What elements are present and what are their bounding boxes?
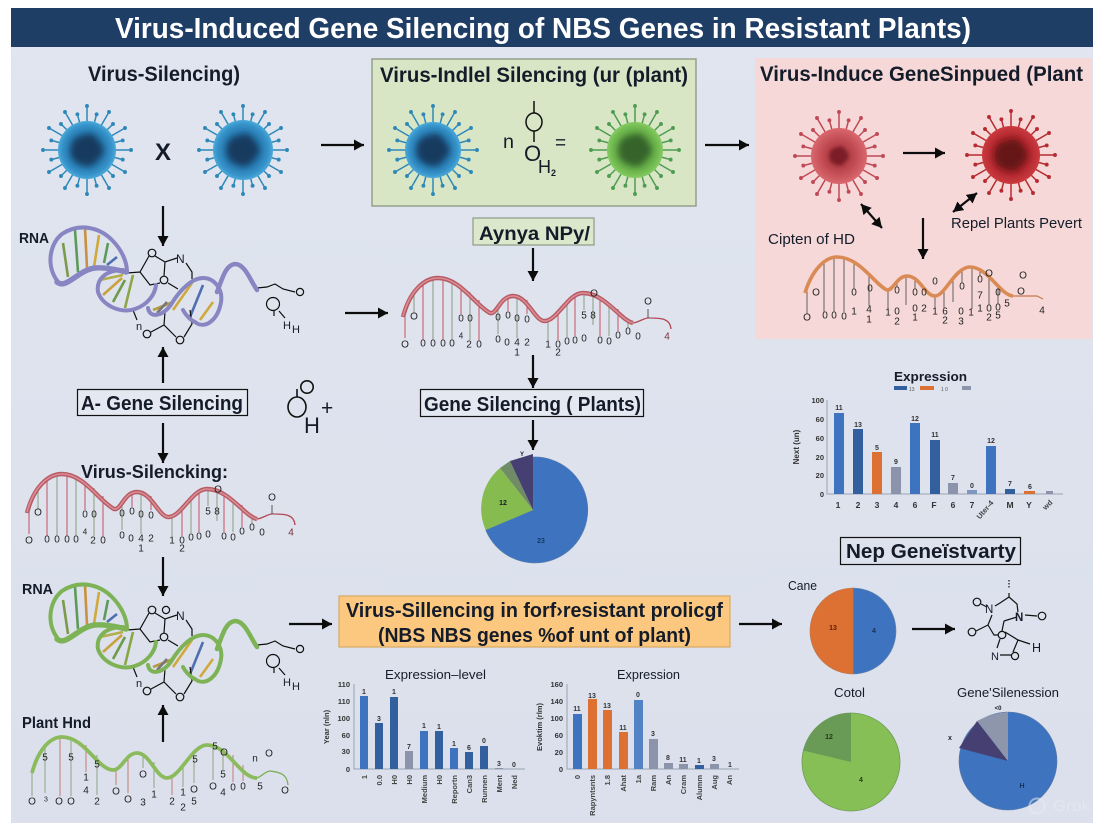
- icon: green RNA helix: H: [283, 677, 291, 689]
- panel: virus silencing heading and viruses: X: [155, 139, 171, 166]
- icon: molecule: [968, 580, 1046, 663]
- bar chart: expression bottom: Aug: [710, 775, 719, 790]
- arrow: viruses to green panel: [321, 144, 364, 146]
- orange strand: 0: [995, 288, 1001, 298]
- panel: red virus-induced gene: [755, 58, 1092, 339]
- bar chart: expression bottom: 11: [619, 725, 627, 732]
- orange strand: 4: [1039, 306, 1045, 316]
- bar chart: expression-level: [322, 668, 525, 804]
- icon: green strand: 5: [192, 754, 198, 766]
- bar chart: expression-level: H0: [390, 775, 399, 785]
- icon: purple RNA helix: N: [176, 252, 185, 266]
- icon: molecule: N: [1015, 612, 1023, 624]
- bar chart: expression top right: Y: [1026, 500, 1032, 510]
- bar chart: expression-level: 7: [407, 744, 411, 751]
- orange strand: 2: [894, 316, 900, 328]
- icon: green strand: 5: [68, 752, 74, 764]
- orange strand: 3: [958, 316, 964, 328]
- panel: green virus-induced silencing: [372, 59, 696, 206]
- icon: green strand: n: [252, 754, 258, 764]
- orange strand: O: [812, 288, 820, 298]
- arrow: down to virus-silencking: [162, 423, 164, 463]
- orange strand: O: [1019, 270, 1027, 282]
- arrow: virus to RNA: [162, 206, 164, 246]
- orange strand: 4: [866, 304, 872, 316]
- bar chart: expression top right: 12: [987, 438, 995, 445]
- label: Aynya NP box: Aynya NPy/: [479, 224, 591, 245]
- icon: purple RNA helix: H: [283, 320, 291, 332]
- bar chart: expression top right: 5: [875, 445, 879, 452]
- icon: green strand: O: [55, 796, 63, 808]
- icon: chemical formula with plus: [288, 381, 333, 438]
- arrow: to pie: [532, 420, 534, 450]
- watermark: Grok: [1030, 798, 1091, 815]
- bar chart: expression-level: 0: [512, 762, 516, 769]
- orange strand: 0: [912, 304, 918, 314]
- orange strand: 0: [851, 288, 857, 298]
- icon: purple RNA helix: RNA: [19, 231, 49, 247]
- orange strand: 0: [959, 282, 965, 292]
- arrow: up to green helix: [162, 705, 164, 742]
- icon: green strand: 3: [44, 796, 48, 804]
- arrow: helix to orange box: [289, 623, 332, 625]
- bar chart: expression bottom: 0: [636, 692, 640, 699]
- icon: green strand: 4: [83, 786, 89, 796]
- icon: green strand: 2: [169, 796, 175, 808]
- icon: green strand: 5: [191, 796, 197, 808]
- orange strand: O: [803, 312, 811, 324]
- bar chart: expression top right: 7: [970, 500, 975, 510]
- orange strand: 5: [995, 310, 1001, 322]
- pie chart: centre: [481, 452, 588, 563]
- icon: green strand: O: [209, 782, 217, 792]
- bar chart: expression top right: 4: [894, 500, 899, 510]
- pie chart: Cane: Cane: [788, 579, 817, 593]
- bar chart: expression top right: 20: [816, 471, 824, 480]
- panel: green virus-induced silencing: Virus-Indlel Silencing (ur (plant): [380, 64, 688, 87]
- bar chart: expression bottom: Rapyntsnts: [588, 775, 597, 816]
- label: Aynya NP box: [473, 218, 594, 245]
- bar chart: expression bottom: Evoktim (rlm): [535, 703, 544, 751]
- callout: orange box: [339, 596, 730, 647]
- panel: green virus-induced silencing: O: [524, 141, 541, 166]
- bar chart: expression bottom: 3: [651, 731, 655, 738]
- bar chart: expression top right: 13: [909, 387, 915, 393]
- icon: green strand: O: [190, 784, 198, 796]
- bar chart: expression top right: Next (un): [792, 429, 801, 464]
- bar chart: expression-level: 1: [360, 775, 369, 779]
- arrow: RNA to middle strand: [345, 312, 388, 314]
- icon: green strand: 1: [151, 790, 157, 800]
- bar chart: expression bottom: 1a: [634, 774, 643, 783]
- orange strand: 0: [822, 310, 828, 322]
- bar chart: expression-level: Year (nln): [322, 709, 331, 744]
- bar chart: expression top right: 1 0: [941, 387, 948, 393]
- bar chart: expression-level: 100: [337, 714, 350, 723]
- icon: green strand: 2: [94, 796, 100, 808]
- bar chart: expression-level: 0: [346, 765, 350, 774]
- icon: green strand: 4: [220, 788, 226, 798]
- orange strand: 0: [841, 312, 847, 322]
- bar chart: expression bottom: 100: [550, 714, 563, 723]
- orange strand: 2: [942, 316, 948, 326]
- bar chart: expression bottom: Ahat: [619, 775, 628, 792]
- bar chart: expression-level: 1: [362, 689, 366, 696]
- bar chart: expression-level: 60: [342, 731, 350, 740]
- icon: molecule: N: [991, 651, 999, 663]
- panel: green virus-induced silencing: =: [555, 133, 566, 154]
- orange strand: 0: [912, 288, 918, 298]
- bar chart: expression-level: H0: [405, 775, 414, 785]
- pie chart: Cotol: 12: [825, 734, 833, 741]
- panel: green virus-induced silencing: n: [503, 132, 514, 153]
- arrow: label to middle strand: [532, 248, 534, 281]
- orange strand: 0: [867, 284, 873, 294]
- orange strand: 0: [894, 306, 900, 318]
- label: A- Gene Silencing: A- Gene Silencing: [81, 393, 243, 415]
- icon: purple RNA helix: n: [136, 321, 142, 333]
- bar chart: expression-level: 1: [422, 723, 426, 730]
- bar chart: expression bottom: Alumm: [695, 775, 704, 800]
- bar chart: expression bottom: 11: [573, 706, 581, 713]
- icon: green strand: O: [265, 748, 273, 760]
- arrow: strand to gene silencing: [532, 355, 534, 388]
- pie chart: Cane: [788, 579, 896, 674]
- icon: red strand middle: [401, 278, 671, 358]
- panel: red virus-induced gene: Virus-Induce GeneSinpued (Plant: [760, 63, 1083, 86]
- bar chart: expression bottom: Cram: [679, 775, 688, 794]
- bar chart: expression top right: 3: [875, 500, 880, 510]
- bar chart: expression top right: 60: [816, 434, 824, 443]
- bar chart: expression bottom: An: [664, 775, 673, 785]
- bar chart: expression bottom: 20: [555, 748, 563, 757]
- icon: chemical formula with plus: +: [321, 397, 333, 420]
- pie chart: Cotol: 4: [859, 777, 863, 784]
- icon: green strand: O: [67, 796, 75, 808]
- icon: molecule: N: [985, 604, 993, 616]
- pie chart: Cotol: Cotol: [834, 686, 865, 700]
- bar chart: expression bottom: Expression: [617, 668, 680, 682]
- orange strand: 1: [977, 304, 983, 314]
- bar chart: expression bottom: Ram: [649, 775, 658, 791]
- bar chart: expression top right: 20: [816, 453, 824, 462]
- bar chart: expression bottom: 11: [679, 757, 687, 764]
- icon: green strand: 0: [230, 782, 236, 794]
- orange strand: 0: [831, 310, 837, 322]
- bar chart: expression bottom: An: [725, 775, 734, 785]
- bar chart: expression bottom: 13: [603, 703, 611, 710]
- arrow: strand to green helix: [162, 557, 164, 596]
- arrow: pie to molecule: [912, 628, 955, 630]
- pie chart: Cane: 4: [872, 628, 876, 635]
- bar chart: expression-level: 1: [452, 741, 456, 748]
- bar chart: expression bottom: [535, 668, 739, 816]
- orange strand: 6: [942, 306, 948, 318]
- panel: red virus-induced gene: Repel Plants Pevert: [951, 216, 1082, 232]
- arrow: green panel to red panel: [705, 144, 749, 146]
- bar chart: expression-level: Ment: [495, 774, 504, 792]
- orange strand: 7: [977, 290, 983, 302]
- bar chart: expression bottom: 60: [555, 731, 563, 740]
- icon: green strand: 0: [240, 782, 246, 792]
- orange strand: 2: [921, 304, 927, 314]
- icon: green RNA helix: H: [292, 681, 300, 693]
- label: Gene Silencing Plants: Gene Silencing ( Plants): [424, 394, 641, 416]
- pie chart: Cane: 13: [829, 625, 837, 632]
- icon: green strand: 2: [180, 802, 186, 814]
- bar chart: expression top right: wd: [1040, 498, 1055, 512]
- bar chart: expression-level: 1: [392, 689, 396, 696]
- bar chart: expression-level: 1: [437, 724, 441, 731]
- bar chart: expression-level: Runnen: [480, 775, 489, 803]
- icon: green strand: O: [124, 794, 132, 806]
- icon: green strand: 3: [140, 798, 146, 808]
- icon: purple RNA helix: [19, 227, 304, 344]
- orange strand: 0: [958, 306, 964, 318]
- orange strand: 1: [968, 308, 974, 318]
- arrow: up to RNA helix: [162, 347, 164, 383]
- bar chart: expression-level: 0.0: [375, 775, 384, 785]
- orange strand: 0: [921, 288, 927, 298]
- icon: green RNA helix: N: [176, 609, 185, 623]
- callout: orange box: (NBS NBS genes %of unt of plant): [378, 625, 691, 647]
- bar chart: expression-level: Expression–level: [385, 668, 486, 682]
- icon: green strand: 5: [42, 752, 48, 764]
- bar chart: expression top right: 7: [1008, 481, 1012, 488]
- bar chart: expression top right: 100: [811, 396, 824, 405]
- bar chart: expression top right: 2: [856, 500, 861, 510]
- icon: green strand: 5: [94, 760, 100, 770]
- bar chart: expression bottom: 160: [550, 680, 563, 689]
- panel: red virus-induced gene: Cipten of HD: [768, 232, 855, 248]
- bar chart: expression-level: 0: [482, 738, 486, 745]
- bar chart: expression top right: 7: [951, 475, 955, 482]
- bar chart: expression top right: 6: [1028, 484, 1032, 491]
- icon: green RNA helix: RNA: [22, 582, 54, 598]
- icon: green strand: 1: [83, 772, 89, 784]
- bar chart: expression bottom: 1: [697, 758, 701, 765]
- icon: green strand: O: [139, 770, 147, 780]
- pie chart: Gene Silenession: x: [948, 735, 952, 742]
- pie chart: Gene Silenession: H: [1019, 783, 1025, 790]
- icon: green RNA helix: [22, 582, 304, 701]
- bar chart: expression-level: 30: [342, 747, 350, 756]
- bar chart: expression top right: 13: [854, 422, 862, 429]
- bar chart: expression top right: 12: [911, 416, 919, 423]
- callout: orange box: Virus-Sillencing in forf›resistant prolicgf: [346, 600, 723, 622]
- panel: virus silencing heading and viruses: [43, 63, 287, 194]
- icon: green RNA helix: n: [136, 678, 142, 690]
- bar chart: expression bottom: 0: [559, 765, 563, 774]
- bar chart: expression top right: 6: [913, 500, 918, 510]
- bar chart: expression top right: Expression: [894, 370, 967, 384]
- icon: molecule: H: [1032, 641, 1041, 655]
- bar chart: expression-level: 3: [377, 716, 381, 723]
- pie chart: centre: Y: [520, 452, 524, 458]
- bar chart: expression top right: M: [1006, 500, 1014, 510]
- bar chart: expression-level: Medium: [420, 775, 429, 803]
- bar chart: expression top right: 0: [820, 490, 824, 499]
- bar chart: expression-level: 110: [338, 680, 350, 689]
- bar chart: expression-level: Reportn: [450, 775, 459, 804]
- orange strand: 1: [912, 312, 918, 324]
- orange strand: 0: [977, 274, 983, 286]
- icon: green strand: 5: [212, 742, 218, 752]
- bar chart: expression top right: 11: [931, 432, 939, 439]
- heading: Virus-Silencking: Virus-Silencking:: [81, 462, 228, 482]
- bar chart: expression top right: 1: [836, 500, 841, 510]
- text: Plant Hnd: Plant Hnd: [22, 715, 91, 732]
- bar chart: expression top right: 9: [894, 459, 898, 466]
- pie chart: centre: 12: [499, 500, 507, 507]
- panel: green virus-induced silencing: H: [538, 157, 551, 177]
- bar chart: expression bottom: 0: [573, 775, 582, 779]
- orange strand: 5: [1004, 298, 1010, 310]
- bar chart: expression bottom: 1.8: [603, 775, 612, 785]
- panel: green virus-induced silencing: 2: [551, 168, 556, 178]
- bar chart: expression top right: 0: [970, 483, 974, 490]
- orange strand: 0: [986, 304, 992, 314]
- icon: green strand: O: [28, 796, 36, 808]
- bar chart: expression-level: 110: [338, 697, 350, 706]
- pie chart: Cotol: [802, 686, 900, 811]
- bar chart: expression-level: Ned: [510, 775, 519, 789]
- orange strand: 2: [986, 312, 992, 324]
- arrow: orange box to pie: [739, 623, 782, 625]
- icon: purple RNA helix: H: [292, 324, 300, 336]
- watermark: Grok: Grok: [1053, 798, 1091, 815]
- panel: virus silencing heading and viruses: Virus-Silencing): [88, 63, 240, 86]
- pie chart: Gene Silenession: <0: [995, 706, 1002, 712]
- orange strand: O: [1017, 286, 1025, 298]
- pie chart: centre: 23: [537, 538, 545, 545]
- icon: green strand: [28, 737, 289, 814]
- icon: chemical formula with plus: H: [304, 413, 320, 438]
- bar chart: expression bottom: 8: [666, 755, 670, 762]
- orange strand: 1: [851, 306, 857, 318]
- orange strand: 0: [894, 286, 900, 296]
- bar chart: expression-level: H0: [435, 775, 444, 785]
- orange strand: 1: [885, 308, 891, 318]
- bar chart: expression bottom: 140: [550, 697, 563, 706]
- bar chart: expression bottom: 13: [588, 693, 596, 700]
- bar chart: expression top right: [792, 370, 1063, 521]
- bar chart: expression top right: 6: [951, 500, 956, 510]
- bar chart: expression bottom: 1: [728, 762, 732, 769]
- icon: green strand: O: [281, 786, 289, 796]
- bar chart: expression top right: F: [931, 500, 937, 510]
- orange strand: 1: [866, 314, 872, 326]
- bar chart: expression-level: 3: [497, 761, 501, 768]
- title bar: Virus-Induced Gene Silencing of NBS Genes in Resistant Plants): [115, 13, 971, 45]
- bar chart: expression top right: 60: [816, 415, 824, 424]
- icon: green strand: 5: [220, 770, 226, 780]
- box heading: Nep Geneistvarty: Nep Geneïstvarty: [846, 541, 1017, 563]
- pie chart: Gene Silenession: [948, 686, 1059, 810]
- orange strand: O: [985, 268, 993, 280]
- bar chart: expression-level: Can3: [465, 775, 474, 793]
- icon: green strand: O: [112, 786, 120, 798]
- bar chart: expression top right: 11: [835, 405, 843, 412]
- pie chart: Gene Silenession: Gene'Silenession: [957, 686, 1059, 700]
- orange strand: [803, 257, 1045, 328]
- orange strand: 1: [932, 306, 938, 318]
- bar chart: expression top right: Uter-4: [975, 498, 996, 521]
- icon: red strand left: [25, 474, 295, 554]
- title bar: [11, 8, 1093, 47]
- bar chart: expression-level: 6: [467, 745, 471, 752]
- orange strand: 0: [932, 276, 938, 288]
- icon: green strand: O: [220, 748, 228, 758]
- icon: green strand: 5: [257, 782, 263, 792]
- bar chart: expression bottom: 3: [712, 756, 716, 763]
- orange strand: 0: [995, 302, 1001, 314]
- icon: green strand: 1: [180, 788, 186, 798]
